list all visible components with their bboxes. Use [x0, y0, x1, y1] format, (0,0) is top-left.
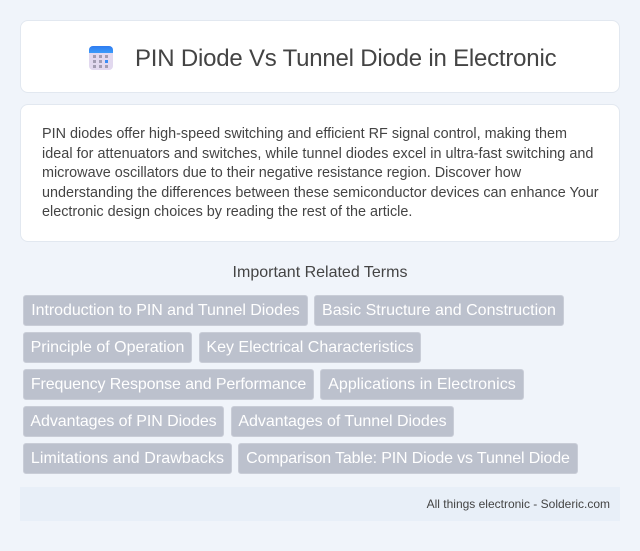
intro text block: PIN diodes offer high-speed switching and efficient RF signal control, making them — [42, 126, 567, 142]
tag — [199, 332, 421, 363]
related terms tags — [23, 295, 578, 474]
tag — [314, 295, 564, 326]
tag — [23, 332, 192, 363]
tag: Key Electrical Characteristics — [206, 339, 414, 356]
tag — [23, 295, 308, 326]
tag — [238, 443, 578, 474]
intro text block — [42, 126, 599, 220]
tag: Basic Structure and Construction — [322, 302, 556, 319]
intro text panel — [20, 104, 620, 242]
intro text block: ideal for attenuators and switches, while tunnel diodes excel in ultra-fast switching and — [42, 146, 593, 162]
title: PIN Diode Vs Tunnel Diode in Electronic — [135, 45, 556, 72]
intro text block: understanding the differences between these semiconductor devices can enhance Your — [42, 184, 599, 200]
tag — [320, 369, 524, 400]
tag — [23, 443, 232, 474]
tag: Limitations and Drawbacks — [31, 450, 224, 467]
tag: Frequency Response and Performance — [31, 376, 306, 393]
intro text block: electronic design choices by reading the rest of the article. — [42, 204, 412, 220]
intro text block: microwave oscillators due to their negative resistance region. Discover how — [42, 165, 521, 181]
tag: Advantages of PIN Diodes — [30, 413, 217, 430]
footer — [20, 487, 620, 521]
icon: calendar — [89, 46, 113, 70]
tag: Introduction to PIN and Tunnel Diodes — [31, 302, 300, 319]
tag: Advantages of Tunnel Diodes — [238, 413, 447, 430]
tag — [23, 406, 224, 437]
header panel — [20, 20, 620, 93]
tag — [231, 406, 454, 437]
tag: Applications in Electronics — [328, 376, 516, 393]
section heading: Important Related Terms — [233, 264, 407, 281]
tag — [23, 369, 314, 400]
tag: Principle of Operation — [31, 339, 184, 356]
footer: All things electronic - Solderic.com — [427, 497, 610, 511]
tag: Comparison Table: PIN Diode vs Tunnel Diode — [246, 450, 570, 467]
